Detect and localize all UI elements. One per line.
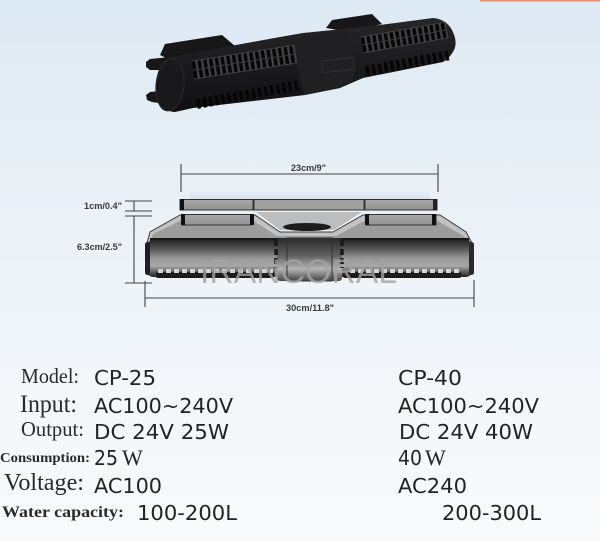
top accent line <box>480 0 600 2</box>
spec values: CP-25 <box>94 366 238 525</box>
spec labels: Model: <box>21 364 79 388</box>
left lower grille <box>197 85 299 104</box>
logo plate <box>321 57 355 73</box>
spec values: CP-25: W <box>122 445 143 470</box>
spec values: CP-25: AC100 <box>94 474 162 498</box>
dimension: 1cm <box>84 201 152 212</box>
spec labels <box>0 364 124 521</box>
diagram: side view with dimensions <box>77 163 474 314</box>
spec values: CP-25: DC 24V 25W <box>94 420 229 444</box>
product photo: wave pump <box>146 14 456 112</box>
spec values: CP-25: 25 <box>94 446 118 470</box>
mounting clips <box>146 14 382 105</box>
right upper grille <box>362 30 447 45</box>
upper mounting plates <box>180 200 437 210</box>
dimension: 6.3cm <box>77 216 152 283</box>
pump body <box>156 18 456 112</box>
dimension: 23cm: 23cm/9" <box>291 163 326 174</box>
spec values: CP-40: AC100~240V <box>398 394 539 418</box>
spec labels: Water capacity: <box>2 504 124 521</box>
spec values: CP-40: W <box>425 445 446 470</box>
dimension: 30cm: 30cm/11.8" <box>286 303 334 314</box>
spec labels: Voltage: <box>4 470 84 496</box>
left upper grille <box>193 54 296 70</box>
spec values: CP-40: 200-300L <box>442 501 542 525</box>
right lower grille <box>366 55 450 71</box>
dimension: 23cm <box>181 163 438 192</box>
spec values: CP-25: AC100~240V <box>94 394 233 418</box>
impeller teeth <box>156 271 461 278</box>
spec values: CP-40: DC 24V 40W <box>399 420 533 444</box>
spec labels: Input: <box>20 391 77 418</box>
end cap <box>153 58 187 112</box>
dimension: 1cm: 1cm/0.4" <box>84 201 122 212</box>
center coupling <box>276 238 342 281</box>
watermark: IRANCORAL <box>200 253 397 291</box>
spec values: CP-40: AC240 <box>398 474 467 498</box>
center coupling <box>297 30 354 95</box>
spec values: CP-40 <box>398 366 542 525</box>
lower mounting plates <box>182 214 436 225</box>
spec values: CP-25: CP-25 <box>94 366 156 390</box>
dimension: 6.3cm: 6.3cm/2.5" <box>77 242 122 253</box>
spec labels: Consumption: <box>0 451 90 466</box>
pump side body <box>145 212 474 277</box>
soft shadow above the pump <box>190 190 430 200</box>
spec labels: Output: <box>21 417 84 441</box>
spec values: CP-40: CP-40 <box>398 366 462 390</box>
dimension: 30cm <box>145 280 474 314</box>
spec values: CP-25: 100-200L <box>137 501 238 525</box>
spec values: CP-40: 40 <box>398 446 422 470</box>
